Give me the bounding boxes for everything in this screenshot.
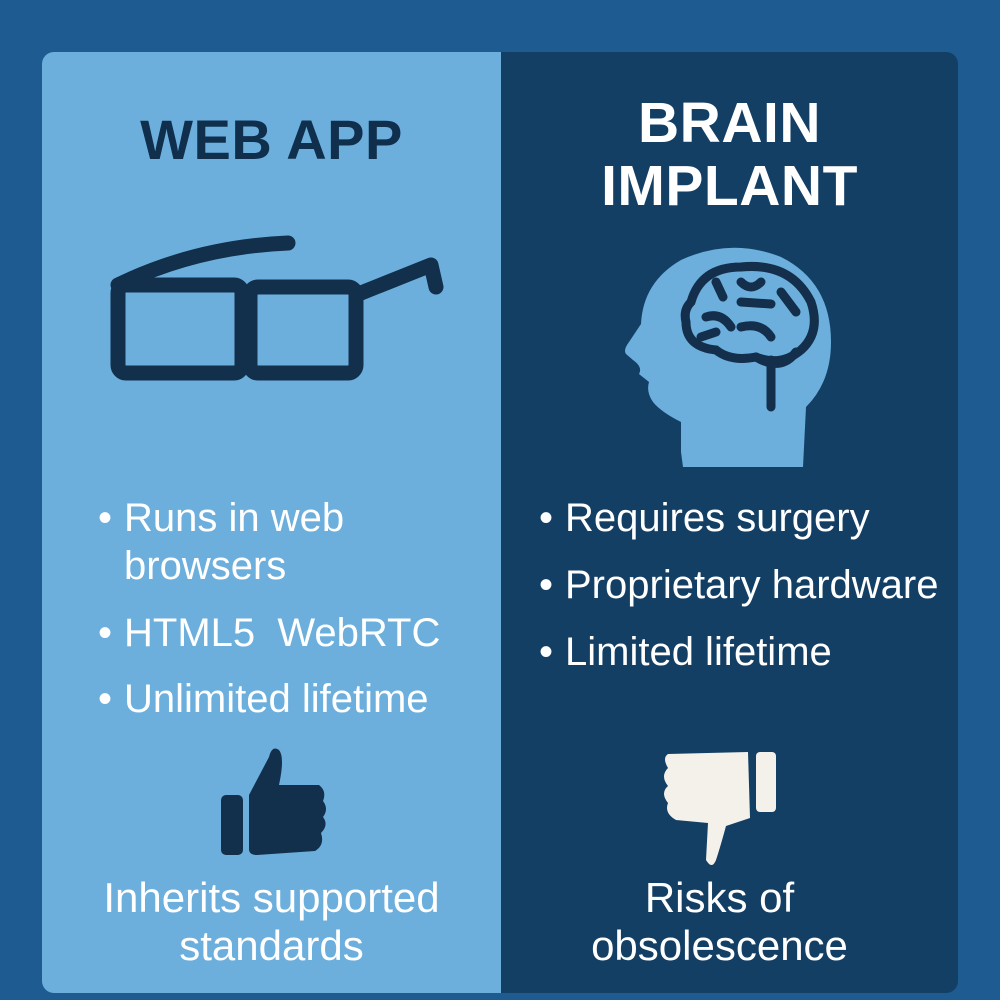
caption: risks of obsolescence: obsolescence <box>591 922 848 969</box>
bullets: web app: browsers <box>124 544 286 588</box>
bullets: brain implant: Proprietary hardware <box>565 563 938 607</box>
title: brain implant: BRAIN <box>638 91 821 155</box>
caption: risks of obsolescence: Risks of <box>645 874 794 921</box>
bullets: web app: • <box>98 677 112 721</box>
title: web app: WEB APP <box>140 108 403 171</box>
panel: web app <box>42 52 501 993</box>
caption: risks of obsolescence <box>591 874 848 969</box>
bullets: brain implant: • <box>539 630 553 674</box>
bullets: brain implant: • <box>539 496 553 540</box>
icon: thumbs up <box>221 748 326 855</box>
bullets: brain implant: Requires surgery <box>565 496 870 540</box>
caption: inherits supported standards <box>103 874 440 969</box>
bullets: web app: • <box>98 611 112 655</box>
bullets: web app <box>98 496 440 721</box>
title: brain implant <box>601 91 858 218</box>
bullets: brain implant: • <box>539 563 553 607</box>
icon: glasses <box>110 236 444 380</box>
bullets: brain implant: Limited lifetime <box>565 630 832 674</box>
caption: inherits supported standards: standards <box>179 922 364 969</box>
bullets: web app: Runs in web <box>124 496 344 540</box>
bullets: brain implant <box>539 496 938 674</box>
caption: inherits supported standards: Inherits supported <box>103 874 440 921</box>
icon: thumbs down <box>664 752 776 865</box>
title: brain implant: IMPLANT <box>601 154 858 218</box>
icon: head with brain <box>625 248 831 467</box>
bullets: web app: • <box>98 496 112 540</box>
bullets: web app: HTML5 WebRTC <box>124 611 440 655</box>
panel: brain implant <box>501 52 958 993</box>
bullets: web app: Unlimited lifetime <box>124 677 429 721</box>
